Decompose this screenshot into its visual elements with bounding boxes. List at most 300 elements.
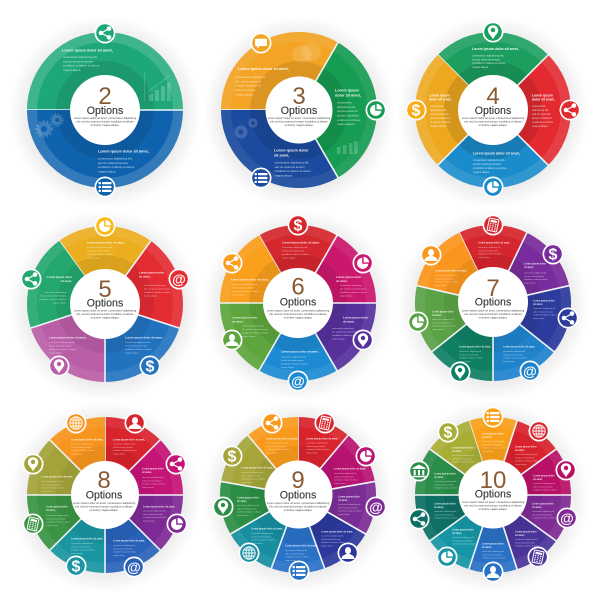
hub: [263, 268, 333, 338]
text: green: [232, 316, 270, 338]
hub: et dolore magna aliqua.: [479, 316, 508, 320]
text: green: sit amet,: [232, 320, 244, 324]
text: red: dolor sit amet,: [532, 98, 555, 102]
icon: share: [262, 412, 282, 434]
text: blue: incididunt ut labore et dolore: [503, 357, 527, 360]
text: orange: [482, 432, 506, 453]
text: blue: magna aliqua.: [274, 174, 293, 178]
text: red: [282, 240, 320, 260]
text: red: Lorem ipsum dolor sit amet,: [478, 242, 510, 244]
text: red: sed do eiusmod tempor: [282, 250, 305, 252]
text: blue: consectetur adipisicing elit,: [281, 356, 307, 358]
text: blue: sed do eiusmod tempor: [125, 344, 148, 348]
hub: [458, 460, 528, 528]
text: orange: incididunt ut labore et dolore: [482, 447, 506, 450]
text: green: magna aliqua.: [337, 122, 355, 126]
text: blue: sed do eiusmod tempor: [113, 547, 133, 550]
text: orange: magna aliqua.: [71, 453, 83, 455]
text: pink: consectetur adipisicing elit,: [533, 482, 556, 485]
icon: user: [420, 244, 442, 266]
segments: [393, 205, 584, 400]
hub: elit, sed do eiusmod tempor incididunt ut labore: [76, 119, 134, 123]
text: green: [335, 88, 361, 126]
text: violet: consectetur adipisicing elit,: [515, 538, 538, 541]
text: red: Lorem ipsum dolor: [515, 446, 537, 448]
text: yellow: sed do eiusmod tempor: [87, 250, 110, 252]
icon: pie: [482, 176, 504, 198]
hub: Lorem ipsum dolor sit amet, consectetur adipisicing: [462, 308, 525, 312]
icon: pie: [356, 446, 376, 466]
text: red: magna aliqua.: [282, 258, 296, 260]
text: red: [113, 438, 145, 455]
text: orange: magna aliqua.: [266, 452, 278, 454]
text: olive: consectetur adipisicing elit,: [452, 454, 475, 457]
text: teal: [459, 346, 491, 363]
icon: at: [288, 370, 308, 392]
text: yellow: magna aliqua.: [87, 258, 101, 260]
text: blue: incididunt ut labore et dolore: [285, 556, 309, 559]
text: blue: Lorem ipsum dolor sit amet,: [473, 152, 520, 156]
text: purple: sit amet,: [524, 266, 534, 269]
icon: at: @: [523, 363, 537, 379]
text: orange: magna aliqua.: [236, 92, 254, 96]
hub: Options: [280, 296, 316, 308]
text: blue: incididunt ut labore et dolore: [473, 166, 507, 170]
text: orange: consectetur adipisicing elit,: [71, 442, 94, 446]
panel: 8 options: [9, 400, 201, 593]
text: pink: Lorem ipsum dolor: [533, 474, 555, 478]
text: purple: incididunt ut labore et dolore: [532, 517, 556, 520]
text: blue: incididunt ut labore et dolore: [125, 348, 153, 351]
text: pink: consectetur adipisicing elit,: [142, 476, 165, 479]
text: red: Lorem ipsum dolor sit amet,: [113, 438, 145, 442]
text: teal: Lorem ipsum dolor sit amet,: [459, 346, 491, 348]
text: green: [39, 275, 73, 304]
text: olive: sed do eiusmod tempor: [41, 483, 61, 486]
text: purple: [49, 336, 87, 354]
text: red: sed do eiusmod tempor: [306, 445, 326, 448]
text: green: consectetur adipisicing elit,: [63, 55, 98, 59]
text: red: Lorem ipsum dolor sit amet,: [306, 438, 338, 440]
text: pink: sed do eiusmod tempor: [533, 485, 553, 488]
text: blue: [482, 542, 506, 560]
text: red: consectetur: [532, 104, 546, 108]
text: purple: elit, sed do eiusmod tempor: [332, 330, 359, 334]
text: red: incididunt ut labore et dolore: [515, 460, 539, 463]
text: purple: magna aliqua.: [143, 520, 155, 522]
hub: elit, sed do eiusmod tempor incididunt ut labore: [75, 504, 133, 508]
segments: [26, 32, 184, 188]
text: blue: consectetur adipisicing elit,: [113, 544, 136, 547]
text: purple: incididunt ut labore et dolore: [143, 516, 167, 519]
text: blue: incididunt ut labore et dolore: [98, 165, 135, 169]
text: green: Lorem ipsum dolor sit amet,: [472, 47, 519, 51]
text: red: Lorem ipsum: [532, 94, 553, 98]
icon: list: [250, 168, 272, 188]
icon: dollar: $: [146, 358, 155, 376]
icon: globe: [528, 420, 550, 442]
text: blue: [98, 150, 149, 173]
hub: [458, 267, 528, 337]
text: blue: sed do eiusmod tempor: [281, 359, 304, 362]
text: green: incididunt ut labore et dolore: [39, 298, 67, 301]
text: purple: sed do eiusmod tempor: [338, 506, 358, 509]
icon: pie: [408, 312, 428, 332]
text: red: [478, 242, 510, 259]
text: pink: magna aliqua.: [340, 296, 354, 298]
text: teal: Lorem ipsum dolor sit amet,: [251, 528, 283, 530]
text: pink: [142, 468, 166, 489]
segments: [212, 32, 406, 217]
text: green: [62, 48, 113, 72]
text: dark teal: Lorem ipsum dolor: [434, 502, 456, 506]
panel: 6 options: [200, 201, 396, 405]
shadow: [202, 209, 394, 401]
icon: pie: [366, 100, 386, 120]
text: pink: sed do eiusmod tempor: [142, 479, 162, 482]
panel: 4 options: [382, 0, 600, 221]
text: orange: magna aliqua.: [430, 124, 447, 128]
hub: Lorem ipsum dolor sit amet, consectetur adipisicing: [267, 501, 330, 505]
text: green: [237, 496, 261, 517]
icon: dollar: [288, 214, 308, 236]
text: orange: consectetur adipisicing: [236, 75, 265, 79]
text: red: sed do eiusmod tempor: [478, 249, 498, 252]
icon: list: [482, 406, 504, 428]
text: red: adipisicing elit,: [532, 108, 549, 112]
text: green: consectetur adipisicing: [242, 324, 264, 328]
text: green: sed do eiusmod: [337, 109, 358, 113]
segments: [10, 400, 200, 590]
icon: user: [482, 562, 504, 582]
icon: at: @: [127, 559, 141, 575]
text: purple: Lorem ipsum dolor sit amet,: [143, 506, 175, 508]
hub: Lorem ipsum dolor sit amet, consectetur adipisicing: [74, 116, 137, 120]
text: blue: sed do eiusmod tempor: [98, 161, 128, 165]
icon: pin: [48, 356, 70, 376]
text: orange: adipisicing elit,: [430, 108, 447, 112]
text: red: magna aliqua.: [515, 464, 527, 466]
text: orange: Lorem ipsum dolor sit amet,: [238, 67, 289, 71]
text: green: consectetur adipisicing elit,: [46, 514, 69, 517]
text: pink: consectetur adipisicing elit,: [334, 472, 357, 475]
text: green: consectetur: [337, 100, 352, 104]
text: red: incididunt ut labore et dolore: [144, 291, 172, 294]
text: blue: sed do eiusmod tempor: [482, 553, 502, 556]
text: teal: incididunt ut labore et dolore: [251, 539, 275, 542]
text: purple: incididunt ut labore et dolore: [49, 348, 77, 351]
text: navy: [533, 300, 557, 320]
text: purple: consectetur adipisicing elit,: [532, 510, 555, 513]
text: green: [434, 472, 458, 490]
text: orange: sit amet,: [482, 436, 492, 439]
text: red: consectetur adipisicing elit,: [306, 442, 329, 444]
text: olive: consectetur adipisicing elit,: [41, 480, 64, 483]
text: purple: [143, 506, 175, 522]
icon: user: [222, 330, 242, 350]
text: red: consectetur adipisicing elit,: [515, 453, 538, 456]
hub: et dolore magna aliqua.: [284, 316, 313, 320]
text: pink: incididunt ut labore et dolore: [340, 291, 368, 294]
text: teal: sed do eiusmod tempor: [459, 353, 479, 356]
text: navy: Lorem ipsum dolor sit amet,: [321, 530, 353, 534]
hub: 10: [480, 467, 506, 494]
watermark: bar chart: [144, 72, 170, 101]
text: green: sed do eiusmod tempor: [434, 483, 454, 486]
text: navy: magna aliqua.: [533, 318, 545, 320]
text: olive: [41, 476, 73, 493]
text: purple: sit amet,: [343, 320, 355, 324]
text: red: sed do eiusmod: [532, 112, 551, 116]
text: green: sit amet,: [434, 476, 444, 479]
icon: pin: [352, 330, 374, 350]
icon: dollar: [406, 100, 426, 120]
text: purple: sed do eiusmod tempor: [143, 513, 163, 516]
shadow: [397, 16, 589, 208]
text: blue: consectetur adipisicing elit,: [125, 341, 151, 344]
text: green: incididunt ut labore et dolore: [434, 487, 458, 490]
text: blue: consectetur adipisicing elit,: [274, 160, 309, 164]
text: orange: incididunt ut labore et dolore: [435, 281, 459, 284]
icon: dollar: [140, 356, 160, 376]
icon: at: [366, 496, 386, 518]
text: blue: sit amet,: [274, 154, 289, 158]
icon: globe: [238, 542, 260, 564]
text: blue: sed do eiusmod tempor: [285, 552, 305, 555]
text: teal: Lorem ipsum dolor sit amet,: [71, 538, 103, 540]
text: navy: sed do eiusmod tempor: [321, 538, 341, 541]
text: green: incididunt ut labore et dolore: [242, 332, 270, 334]
text: olive: [241, 466, 273, 484]
icon: pin: [482, 22, 504, 42]
text: blue: magna aliqua.: [98, 169, 116, 173]
text: navy: consectetur adipisicing elit,: [321, 534, 344, 538]
text: teal: magna aliqua.: [459, 361, 471, 363]
text: navy: sed do eiusmod tempor: [533, 310, 553, 313]
text: blue: [125, 336, 163, 354]
text: purple: Lorem ipsum dolor sit amet,: [49, 336, 87, 340]
text: teal: [71, 538, 103, 555]
text: red: ut labore et dolore: [532, 120, 553, 124]
text: green: [46, 506, 70, 527]
shadow: [397, 401, 589, 593]
icon: at: @: [369, 499, 383, 515]
icon: dollar: [222, 446, 242, 466]
text: teal: [251, 528, 283, 545]
segments: [205, 402, 387, 586]
text: teal: sed do eiusmod tempor: [251, 535, 271, 538]
hub: et dolore magna aliqua.: [285, 123, 314, 127]
text: red: consectetur adipisicing elit,: [282, 246, 308, 249]
text: orange: consectetur adipisicing elit,: [435, 274, 458, 277]
text: orange: Lorem ipsum dolor: [482, 432, 504, 436]
text: pink: incididunt ut labore et dolore: [533, 489, 557, 492]
text: teal: sed do eiusmod tempor: [452, 539, 472, 542]
text: green: Lorem ipsum dolor sit amet,: [62, 48, 113, 52]
text: blue: Lorem ipsum dolor sit amet,: [503, 346, 535, 348]
text: green: sit amet,: [237, 500, 247, 503]
text: red: incididunt ut labore et dolore: [478, 253, 502, 256]
text: green: incididunt ut labore et dolore: [432, 325, 456, 328]
text: purple: consectetur adipisicing elit,: [524, 272, 547, 274]
hub: 5: [98, 276, 112, 303]
icon: dollar: $: [412, 102, 421, 120]
text: orange: sed do eiusmod tempor: [71, 446, 91, 449]
text: blue: Lorem ipsum dolor sit amet,: [281, 350, 319, 354]
text: teal: consectetur adipisicing elit,: [251, 532, 274, 535]
text: blue: incididunt ut labore et dolore: [281, 362, 309, 366]
hub: 4: [486, 83, 500, 110]
icon: dollar: $: [444, 424, 453, 442]
icon: dollar: $: [294, 218, 303, 234]
text: navy: [321, 530, 353, 547]
text: green: sit amet,: [46, 509, 56, 512]
text: navy: consectetur adipisicing elit,: [533, 307, 556, 310]
shadow: [202, 401, 394, 593]
text: blue: incididunt ut labore et dolore: [482, 557, 506, 560]
text: yellow: incididunt ut labore et dolore: [87, 253, 115, 256]
text: red: incididunt ut labore et dolore: [282, 253, 310, 256]
text: olive: sed do eiusmod tempor: [241, 474, 261, 477]
text: pink: sit amet,: [336, 279, 348, 283]
text: teal: incididunt ut labore et dolore: [459, 357, 483, 360]
icon: at: @: [172, 271, 186, 287]
text: dark teal: sed do eiusmod tempor: [434, 513, 454, 516]
text: pink: [533, 474, 557, 492]
text: purple: incididunt ut labore et dolore: [338, 510, 362, 513]
hub: Lorem ipsum dolor sit amet, consectetur adipisicing: [74, 308, 137, 312]
text: blue: consectetur adipisicing elit,: [285, 549, 308, 552]
icon: calculator: [528, 546, 548, 568]
watermark: bar chart: [337, 141, 358, 154]
icon: pin: [22, 454, 44, 474]
hub: [264, 460, 332, 528]
text: purple: magna aliqua.: [524, 282, 536, 284]
text: navy: incididunt ut labore et dolore: [533, 314, 557, 317]
segments: [382, 0, 600, 221]
icon: pie: [352, 252, 374, 274]
text: green: magna aliqua.: [472, 65, 489, 69]
icon: chat: [250, 32, 272, 54]
text: purple: [338, 496, 362, 516]
icon: pin: [212, 496, 234, 518]
text: olive: sit amet,: [452, 450, 462, 453]
text: olive: [452, 446, 476, 464]
text: teal: consectetur adipisicing elit,: [71, 542, 94, 545]
text: olive: Lorem ipsum dolor: [452, 446, 474, 450]
text: green: sit amet,: [61, 279, 72, 283]
text: purple: consectetur adipisicing elit,: [143, 510, 166, 512]
icon: at: [520, 360, 540, 382]
text: blue: magna aliqua.: [285, 560, 297, 562]
hub: Options: [87, 105, 123, 117]
text: blue: consectetur adipisicing elit,: [98, 156, 133, 160]
icon: list: [288, 560, 310, 582]
icon: pie: [166, 514, 188, 534]
text: orange: Lorem ipsum dolor sit amet,: [231, 278, 269, 282]
text: orange: magna aliqua.: [482, 451, 494, 453]
text: blue: [503, 346, 535, 363]
hub: elit, sed do eiusmod tempor incididunt ut labore: [464, 312, 522, 316]
text: olive: incididunt ut labore et dolore: [241, 478, 265, 481]
text: green: sed do eiusmod tempor: [472, 57, 500, 61]
text: green: sed do eiusmod tempor: [237, 507, 257, 510]
text: dark teal: incididunt ut labore et dolore: [434, 517, 458, 520]
hub: Options: [86, 490, 122, 502]
text: purple: [532, 502, 556, 520]
text: purple: consectetur adipisicing: [332, 327, 354, 330]
icon: at: @: [291, 373, 305, 389]
text: purple: sit amet,: [532, 506, 542, 509]
text: pink: [334, 468, 366, 485]
hub: [266, 76, 332, 144]
text: green: magna aliqua.: [432, 329, 444, 331]
icon: share: [20, 268, 42, 290]
text: red: incididunt ut labore et dolore: [306, 448, 330, 451]
icon: at: [168, 268, 190, 290]
text: blue: magna aliqua.: [125, 352, 139, 354]
icon: calculator: [314, 412, 336, 434]
text: purple: [332, 316, 369, 340]
hub: Lorem ipsum dolor sit amet, consectetur adipisicing: [268, 116, 331, 120]
icon: list: [94, 176, 116, 198]
hub: et dolore magna aliqua.: [91, 316, 120, 320]
hub: elit, sed do eiusmod tempor incididunt ut labore: [464, 504, 522, 508]
text: red: Lorem ipsum dolor sit amet,: [282, 240, 320, 244]
hub: [71, 461, 139, 529]
hub: et dolore magna aliqua.: [91, 123, 120, 127]
text: red: [532, 94, 555, 128]
icon: bank: [408, 460, 430, 482]
hub: 9: [291, 467, 305, 494]
text: blue: [473, 152, 520, 174]
hub: elit, sed do eiusmod tempor incididunt ut labore: [76, 312, 134, 316]
text: blue: Lorem ipsum dolor sit amet,: [113, 540, 145, 542]
text: pink: Lorem ipsum dolor: [142, 468, 164, 470]
text: green: incididunt ut labore et dolore: [472, 61, 506, 65]
watermark: chat bubbles: [292, 43, 321, 62]
hub: Lorem ipsum dolor sit amet, consectetur adipisicing: [462, 116, 525, 120]
text: red: [306, 438, 338, 454]
text: green: Lorem ipsum dolor: [434, 472, 456, 476]
icon: dollar: [542, 244, 564, 264]
text: blue: incididunt ut labore et dolore: [113, 551, 137, 554]
text: olive: Lorem ipsum dolor sit amet,: [241, 466, 273, 470]
text: navy: Lorem ipsum dolor: [533, 300, 555, 302]
panel: 7 options: [393, 205, 589, 401]
text: green: magna aliqua.: [63, 68, 81, 72]
text: teal: sit amet,: [452, 532, 462, 535]
text: blue: [285, 544, 317, 562]
hub: et dolore magna aliqua.: [90, 508, 119, 512]
shadow: [9, 401, 201, 593]
text: navy: incididunt ut labore et dolore: [321, 541, 345, 544]
hub: elit, sed do eiusmod tempor incididunt ut labore: [270, 119, 328, 123]
text: yellow: consectetur adipisicing elit,: [87, 246, 113, 249]
text: purple: magna aliqua.: [338, 514, 350, 516]
text: red: consectetur adipisicing: [144, 284, 166, 287]
text: green: magna aliqua.: [237, 515, 249, 517]
text: red: magna aliqua.: [306, 452, 318, 454]
text: navy: magna aliqua.: [321, 545, 333, 547]
text: purple: incididunt ut labore et dolore: [524, 278, 548, 281]
text: purple: consectetur adipisicing elit,: [49, 341, 75, 344]
icon: calculator: [482, 214, 504, 236]
hub: Options: [281, 105, 317, 117]
icon: share: [222, 252, 242, 274]
text: teal: incididunt ut labore et dolore: [71, 549, 95, 552]
text: red: sit amet,: [139, 274, 151, 278]
